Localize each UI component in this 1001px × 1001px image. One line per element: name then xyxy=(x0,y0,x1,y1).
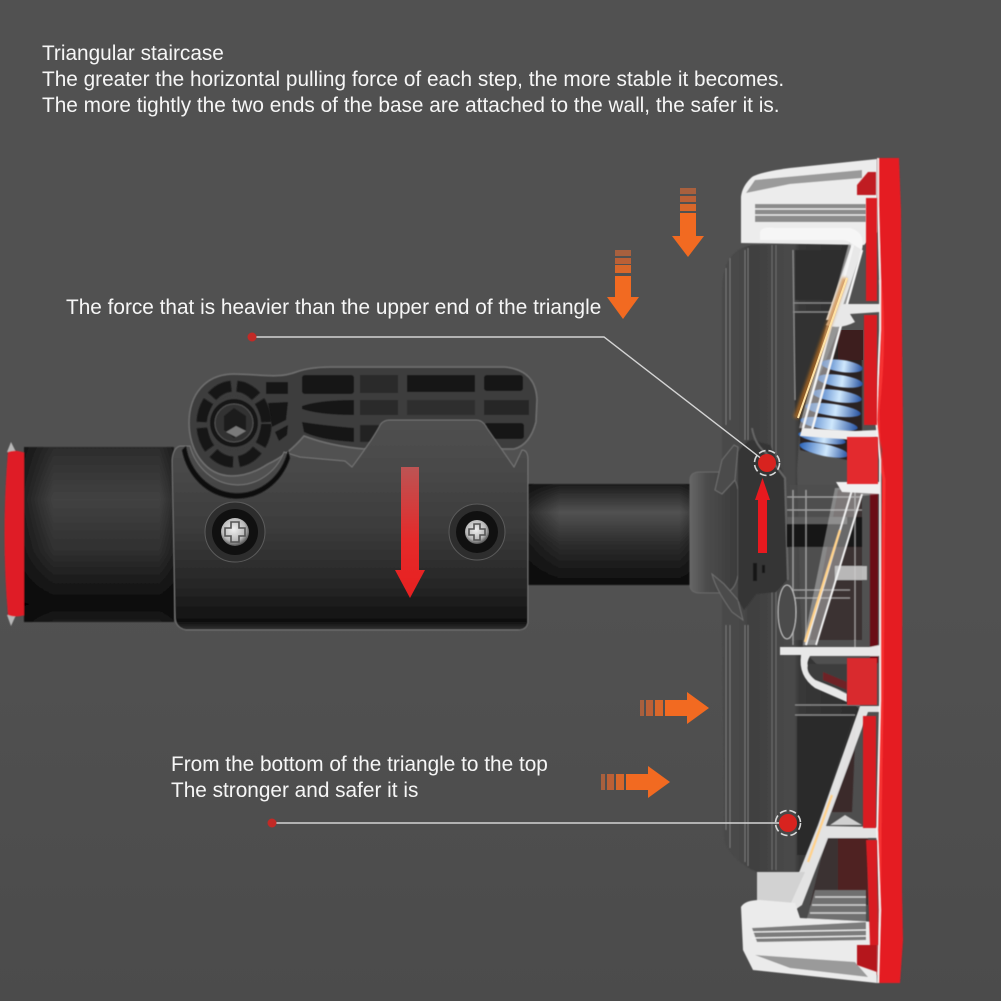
middle triangle brace xyxy=(803,482,880,645)
orange arrow: right lower xyxy=(601,766,670,798)
blue spring coils xyxy=(797,357,864,461)
wall base plate xyxy=(722,243,860,872)
callout text: lower force: The stronger and safer it is xyxy=(171,779,418,802)
middle transparent compartment xyxy=(778,485,880,702)
lower triangle brace xyxy=(786,706,880,912)
red up arrow on base xyxy=(755,478,770,553)
top translucent end cap xyxy=(741,159,877,320)
collar between tube and base xyxy=(690,428,788,620)
orange arrow: second xyxy=(607,250,639,319)
pull-up bar product illustration xyxy=(4,158,903,983)
red arrow: downward force on clamp xyxy=(395,467,425,598)
folding lever xyxy=(189,367,537,476)
clamp body xyxy=(172,420,528,630)
clamp screws xyxy=(205,502,505,562)
red inner blocks xyxy=(847,172,878,972)
callout leader: upper force xyxy=(248,332,780,476)
heading text block: The greater the horizontal pulling force of each step, the more stable it becomes. xyxy=(42,68,784,91)
heading text block: The more tightly the two ends of the base are attached to the wall, the safer it is. xyxy=(42,94,780,117)
heading text block: Triangular staircase xyxy=(42,42,224,65)
heading text block xyxy=(42,42,784,117)
lever slots xyxy=(266,375,529,442)
spring compartment xyxy=(797,330,864,461)
orange arrow: right upper xyxy=(640,692,709,724)
left tube with red ring xyxy=(4,442,174,626)
callout text: lower force xyxy=(171,753,548,802)
orange glow line on upper brace xyxy=(796,278,847,418)
bottom translucent end cap xyxy=(741,872,877,983)
orange arrow: top xyxy=(672,188,704,257)
callout text: lower force: From the bottom of the triangle to the top xyxy=(171,753,548,776)
narrow tube connecting clamp to base xyxy=(526,484,696,585)
red outer wall plate xyxy=(876,158,903,983)
callout text: upper force: The force that is heavier than the upper end of the triangle xyxy=(66,296,601,319)
callout leader: lower force xyxy=(268,810,800,836)
lever head with hex bolt xyxy=(182,386,290,499)
upper triangle brace xyxy=(799,242,880,440)
